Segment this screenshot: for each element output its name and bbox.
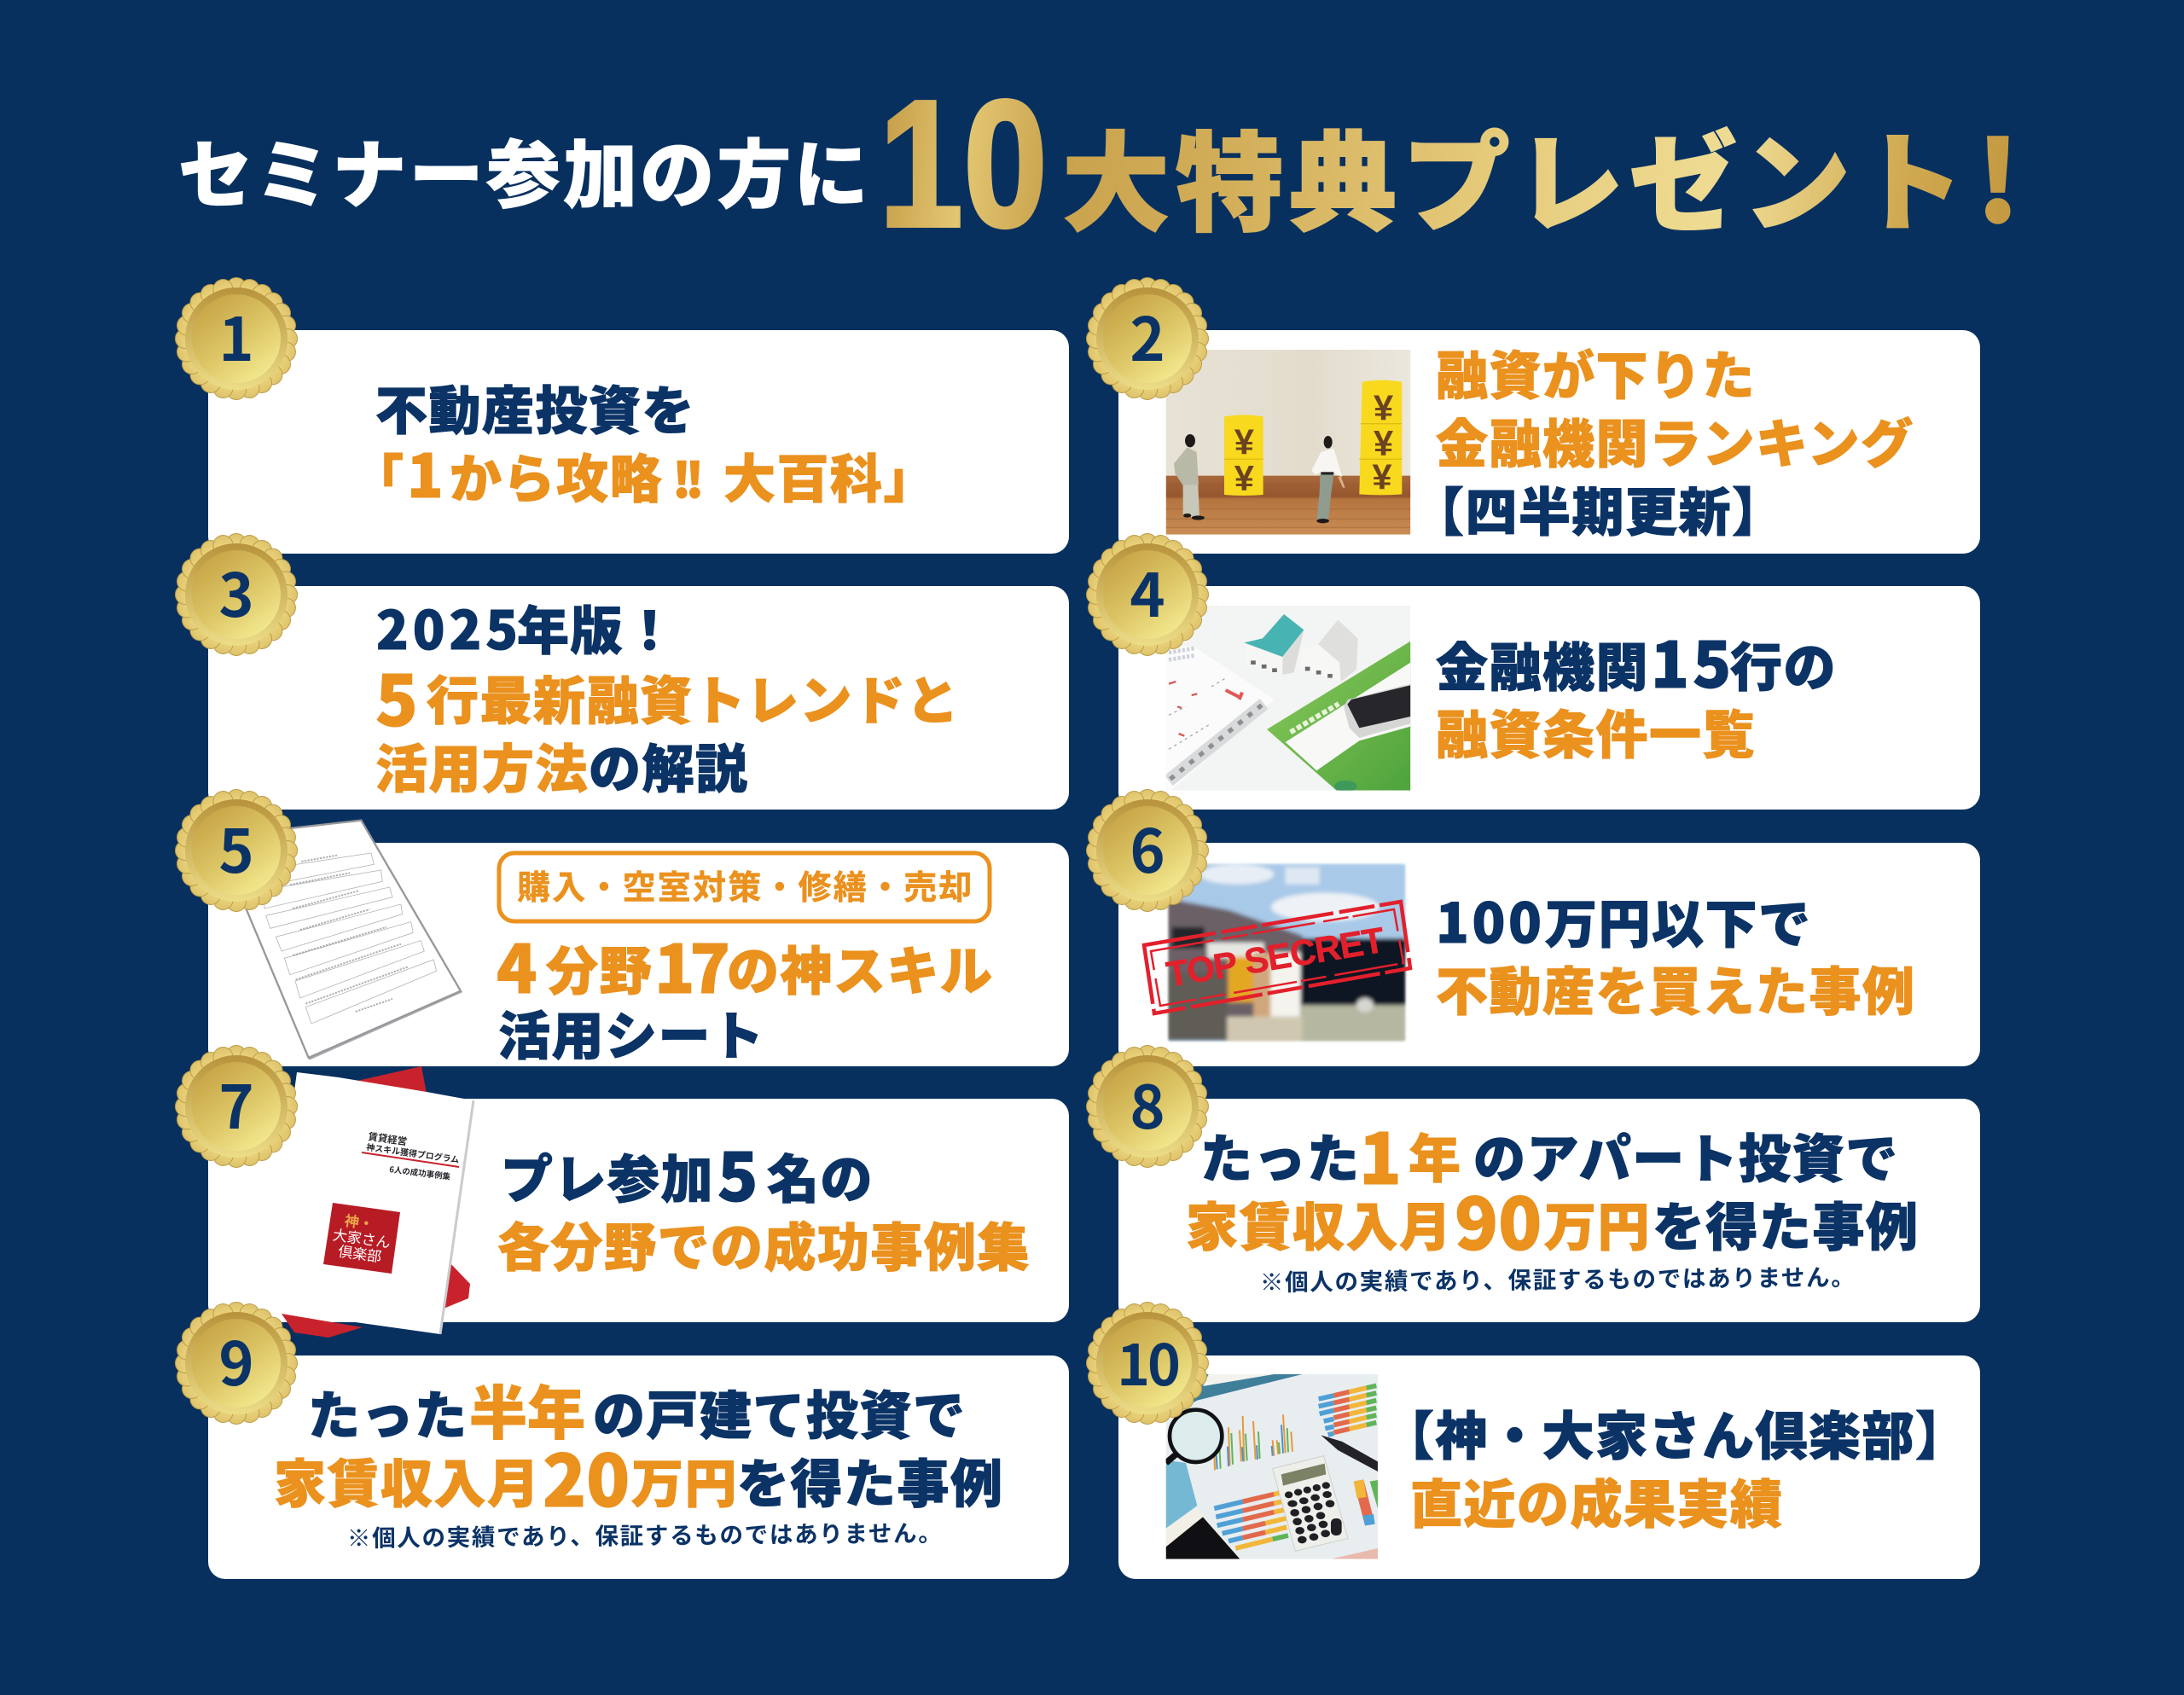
- card 1 subheading: 大百科」: [723, 437, 937, 513]
- card 8 line 1: 年: [1409, 1117, 1462, 1193]
- stamp: TOP SECRET: [1144, 902, 1410, 1013]
- card 5 line 1: の神スキル: [727, 929, 994, 1005]
- illustration: skill sheet: [216, 821, 462, 1060]
- card 3 background: [208, 586, 1069, 810]
- card 3 line 3: 活用方法の解説: [375, 727, 749, 803]
- card 1 heading: 不動産投資を: [375, 369, 695, 444]
- photo: figures and yen blocks: [1166, 350, 1410, 535]
- card 10 line 1: 【神・大家さん倶楽部】: [1382, 1394, 1969, 1470]
- photo: figures and yen blocks: ¥: [1234, 458, 1254, 498]
- panel: benefit 9: [175, 1302, 1069, 1579]
- medal 5: 5: [218, 804, 254, 891]
- medal 7: 7: [218, 1060, 254, 1146]
- panel: benefit 7: [175, 1045, 1069, 1338]
- panel: benefit 3: [175, 533, 1069, 810]
- title: gold headline: 大特典プレゼント: [1062, 98, 1970, 253]
- card 1 background: [208, 330, 1069, 554]
- medal 2: [1086, 277, 1209, 400]
- card 9 background: [208, 1355, 1069, 1579]
- card 9 line 1: たった: [308, 1373, 468, 1449]
- card 7 background: [208, 1099, 1069, 1322]
- category box: [499, 853, 990, 921]
- card 4 line 1: 行の: [1730, 625, 1837, 701]
- card 4 line 1: 金融機関: [1436, 625, 1649, 701]
- medal 8: [1086, 1045, 1209, 1168]
- card 9 line 2: を得た事例: [737, 1442, 1004, 1518]
- card 7 line 1: プレ参加: [501, 1137, 714, 1213]
- card 6 line 1: 万円以下で: [1545, 882, 1812, 958]
- illustration: case study booklet: 大家さん: [332, 1222, 392, 1252]
- card 3 line 2: 5: [375, 645, 419, 746]
- title: gold 10: 10: [879, 62, 1048, 264]
- card 4 line 1: 15: [1651, 615, 1734, 706]
- medal 10: 10: [1117, 1321, 1179, 1402]
- card 5 background: [208, 843, 1069, 1066]
- category box: 購入・空室対策・修繕・売却: [517, 862, 974, 909]
- card 8 line 1: 1: [1359, 1103, 1403, 1204]
- card 8 line 2: を得た事例: [1653, 1185, 1920, 1261]
- medal 3: [175, 533, 298, 656]
- card 4 background: [1118, 586, 1980, 810]
- card 4 line 2: 融資条件一覧: [1436, 693, 1756, 769]
- photo: figures and yen blocks: ¥: [1234, 421, 1254, 461]
- card 8 background: [1118, 1099, 1980, 1322]
- card 7 line 1: 5: [717, 1125, 759, 1221]
- title: [178, 62, 2026, 264]
- photo: houses, calendar and passbook: [1166, 606, 1410, 792]
- card 10 line 2: 直近の成果実績: [1410, 1462, 1784, 1538]
- medal 1: 1: [218, 293, 254, 379]
- medal 8: 8: [1130, 1060, 1165, 1146]
- card 9 line 1: の戸建て投資で: [593, 1373, 967, 1449]
- card 1 subheading: 「: [351, 437, 405, 513]
- card 10 background: [1118, 1355, 1980, 1579]
- card 1 subheading: !!: [672, 443, 700, 512]
- illustration: case study booklet: [264, 1066, 473, 1338]
- infographic: [175, 98, 2010, 1579]
- card 3 line 2: 行最新融資トレンドと: [427, 659, 960, 734]
- panel: benefit 6: [1086, 789, 1980, 1066]
- panel: benefit 8: [1086, 1045, 1980, 1322]
- card 7 line 1: 名の: [767, 1137, 874, 1213]
- card 9 line 2: 家賃収入月: [274, 1442, 541, 1518]
- card 6 line 1: 100: [1436, 880, 1544, 959]
- medal 9: [175, 1302, 298, 1425]
- card 2 line 1: 融資が下りた: [1436, 334, 1756, 409]
- panel: benefit 5: [175, 789, 1069, 1070]
- card 9 line 2: 20: [543, 1425, 630, 1528]
- photo: figures and yen blocks: ¥: [1372, 456, 1392, 496]
- card 1 subheading: 1: [407, 429, 444, 515]
- medal 5: [175, 789, 298, 912]
- photo: figures and yen blocks: ¥: [1374, 423, 1393, 463]
- illustration: case study booklet: 6人の成功事例集: [389, 1163, 451, 1182]
- card 8 line 1: たった: [1200, 1117, 1361, 1193]
- card 5 line 2: 活用シート: [498, 994, 765, 1070]
- card 3 line 1: 年版！: [517, 589, 677, 665]
- stamp: TOP SECRET: TOP SECRET: [1164, 920, 1387, 995]
- medal 4: [1086, 533, 1209, 656]
- medal 7: [175, 1045, 298, 1168]
- illustration: case study booklet: 倶楽部: [337, 1239, 383, 1267]
- photo: charts and calculator: [1166, 1374, 1378, 1559]
- medal 2: 2: [1130, 293, 1165, 379]
- card 5 line 1: 4: [497, 917, 538, 1013]
- panel: benefit 4: [1086, 533, 1980, 810]
- card 2 background: [1118, 330, 1980, 554]
- illustration: case study booklet: 神・: [343, 1209, 375, 1234]
- photo: blurred house: [1163, 859, 1410, 1047]
- photo: figures and yen blocks: ¥: [1374, 387, 1393, 427]
- card 8 note: ※個人の実績であり、保証するものではありません。: [1260, 1258, 1856, 1297]
- medal 6: 6: [1130, 804, 1165, 891]
- card 8 line 2: 90: [1455, 1168, 1542, 1271]
- medal 3: 3: [218, 549, 254, 635]
- title: white lead: セミナー参加の方に: [178, 116, 871, 223]
- medal 1: [175, 277, 298, 400]
- card 5 line 1: 17: [654, 917, 728, 1013]
- card 1 subheading: から攻略: [450, 437, 663, 513]
- card 3 line 1: 2025: [376, 588, 522, 665]
- card 2 line 3: 【四半期更新】: [1412, 470, 1786, 546]
- card 8 line 1: のアパート投資で: [1473, 1117, 1899, 1193]
- medal 4: 4: [1130, 549, 1165, 635]
- card 6 background: [1118, 843, 1980, 1066]
- card 6 line 2: 不動産を買えた事例: [1436, 949, 1916, 1025]
- card 7 line 2: 各分野での成功事例集: [497, 1205, 1031, 1281]
- panel: benefit 10: [1086, 1302, 1980, 1579]
- title: gold headline: !: [1976, 94, 2026, 254]
- card 9 line 1: 半年: [469, 1367, 585, 1451]
- card 8 line 2: 万円: [1544, 1185, 1651, 1261]
- card 2 line 2: 金融機関ランキング: [1436, 402, 1914, 478]
- illustration: case study booklet: 賃貸経営: [367, 1129, 408, 1148]
- card 9 note: ※個人の実績であり、保証するものではありません。: [347, 1514, 944, 1553]
- medal 6: [1086, 789, 1209, 912]
- medal 10: [1086, 1302, 1209, 1425]
- card 5 line 1: 分野: [546, 929, 653, 1005]
- card 8 line 2: 家賃収入月: [1186, 1185, 1453, 1261]
- panel: benefit 1: [175, 277, 1069, 554]
- medal 9: 9: [218, 1317, 254, 1403]
- card 9 line 2: 万円: [631, 1442, 738, 1518]
- panel: benefit 2: [1086, 277, 1980, 554]
- illustration: case study booklet: 神スキル獲得プログラム: [366, 1140, 460, 1165]
